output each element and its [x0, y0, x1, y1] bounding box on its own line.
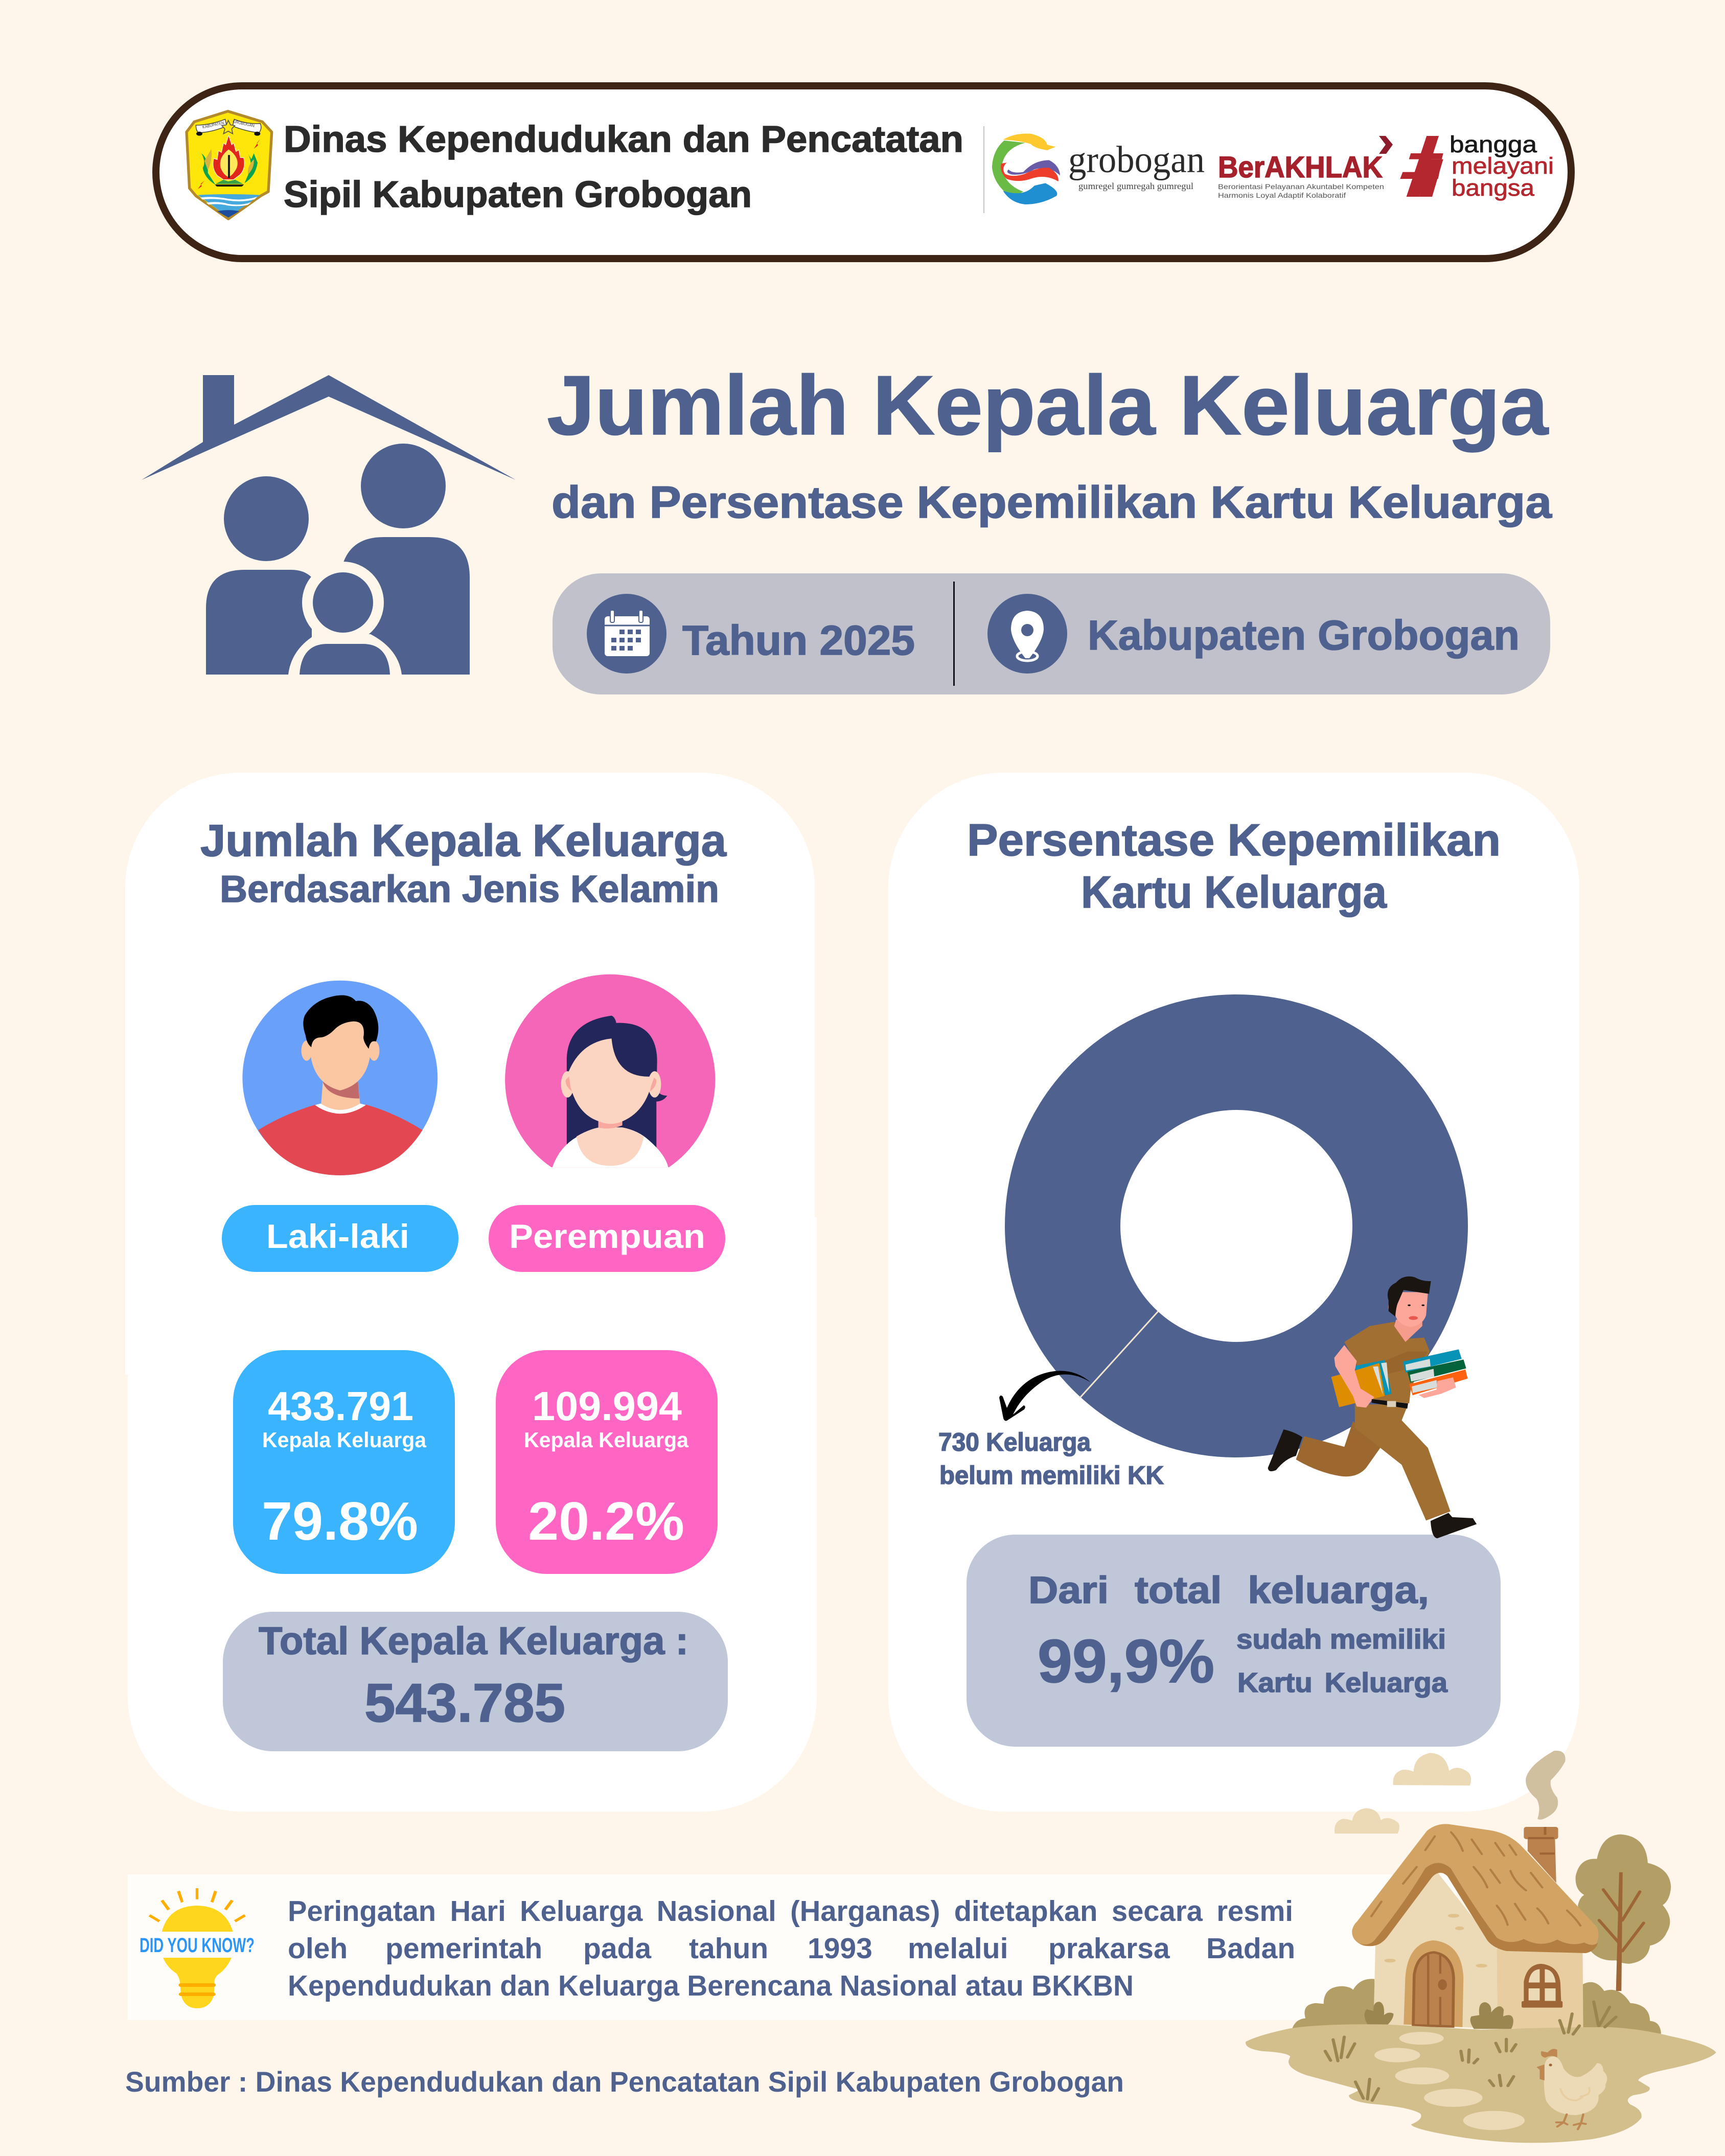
logo: Grobogan: gumregel gumregah gumregul: [1078, 181, 1193, 191]
stat card: male: 433.791: [268, 1383, 413, 1429]
total callout: [223, 1612, 728, 1751]
text: fact paragraph: 1993: [808, 1932, 872, 1965]
logo: BerAKHLAK: BerAKHLAK: [1218, 151, 1383, 184]
text: location: Kabupaten Grobogan: [1088, 612, 1520, 659]
logo: bangga melayani bangsa: bangsa: [1452, 175, 1535, 201]
icon: calendar: [587, 594, 666, 674]
source note: Sumber : Dinas Kependudukan dan Pencatatan Sipil Kabupaten Grobogan: [125, 2066, 1124, 2098]
header text: agency name: Sipil Kabupaten Grobogan: [284, 174, 752, 215]
callout: families without KK: 730 Keluarga: [938, 1428, 1091, 1456]
illustration: running civil servant: [1268, 1277, 1477, 1538]
label: male: Laki-laki: [266, 1217, 409, 1255]
stat card: female: Kepala Keluarga: [524, 1428, 689, 1452]
logo: BerAKHLAK: Harmonis Loyal Adaptif Kolaboratif: [1218, 191, 1346, 199]
logo: bangga melayani bangsa: bangga: [1450, 131, 1537, 157]
panel heading: [200, 815, 727, 910]
subtitle: dan Persentase Kepemilikan Kartu Keluarga: [551, 477, 1552, 527]
stat card: male: [233, 1350, 455, 1574]
text: fact paragraph: Badan: [1206, 1932, 1295, 1965]
panel heading: Berdasarkan Jenis Kelamin: [220, 868, 719, 910]
label: female: Perempuan: [509, 1217, 705, 1255]
icon: Grobogan crest: KABUPATEN: [202, 121, 225, 130]
info pill: year and location: [553, 573, 1550, 694]
icon: light bulb with did you know: [148, 1888, 246, 2008]
stat card: female: 20.2%: [528, 1491, 684, 1551]
text: fact paragraph: prakarsa: [1048, 1932, 1170, 1965]
stat card: male: Kepala Keluarga: [262, 1428, 427, 1452]
logo: BerAKHLAK: Berorientasi Pelayanan Akuntabel Kompeten: [1218, 182, 1384, 191]
icon: Grobogan crest: GROBOGAN: [233, 119, 255, 128]
panel heading: Persentase Kepemilikan: [967, 815, 1501, 865]
donut chart: [1063, 1052, 1410, 1400]
callout: 99,9%: 99,9%: [1038, 1627, 1214, 1696]
header text: agency name: [284, 119, 963, 215]
text: fact paragraph: Kependudukan dan Keluarga Berencana Nasional atau BKKBN: [288, 1969, 1134, 2002]
panel: KK ownership percentage: [888, 773, 1579, 1812]
text: fact paragraph: tahun: [689, 1932, 768, 1965]
panel: household heads by gender: [125, 773, 817, 1812]
stat card: female: 109.994: [532, 1383, 682, 1429]
icon: Grobogan crest: [187, 111, 272, 219]
stat card: male: 79.8%: [262, 1491, 418, 1551]
panel heading: Jumlah Kepala Keluarga: [200, 815, 727, 866]
panel: did you know fact: [128, 1874, 1457, 2020]
panel heading: Kartu Keluarga: [1081, 867, 1387, 917]
text: year: Tahun 2025: [682, 617, 915, 664]
logo: bangga melayani bangsa: [1400, 131, 1554, 201]
text: fact paragraph: melalui: [908, 1932, 1008, 1965]
logo: Grobogan: [992, 133, 1205, 204]
callout: 99,9%: Kartu Keluarga: [1237, 1667, 1448, 1698]
icon: male avatar: [242, 981, 438, 1175]
text: fact paragraph: [288, 1895, 1295, 2002]
text: did you know: DID YOU KNOW?: [140, 1934, 255, 1957]
callout: 99,9%: sudah memiliki: [1236, 1624, 1446, 1655]
header bar: [156, 86, 1571, 259]
label: male: [222, 1205, 458, 1272]
logo: Grobogan: grobogan: [1068, 139, 1205, 181]
total callout: Total Kepala Keluarga :: [259, 1619, 688, 1663]
panel heading: [967, 815, 1501, 917]
logo: bangga melayani bangsa: melayani: [1452, 153, 1554, 179]
header text: agency name: Dinas Kependudukan dan Pencatatan: [284, 119, 963, 160]
title: Jumlah Kepala Keluarga: [547, 358, 1549, 452]
callout: 99,9%: [967, 1535, 1501, 1747]
icon: female avatar: [505, 975, 715, 1167]
arrow: [999, 1371, 1091, 1421]
text: fact paragraph: Peringatan Hari Keluarga Nasional (Harganas) ditetapkan secara resmi: [288, 1895, 1293, 1928]
stat card: female: [496, 1350, 718, 1574]
callout: families without KK: belum memiliki KK: [939, 1461, 1164, 1490]
icon: location pin: [987, 594, 1067, 674]
text: fact paragraph: pada: [583, 1932, 652, 1965]
text: fact paragraph: pemerintah: [385, 1932, 542, 1965]
illustration: cottage scene: [1246, 1751, 1716, 2143]
logo: BerAKHLAK: [1218, 136, 1393, 199]
callout: families without KK: [938, 1428, 1164, 1490]
callout: 99,9%: Dari total keluarga,: [1028, 1569, 1429, 1611]
total callout: 543.785: [364, 1672, 565, 1733]
label: female: [489, 1205, 725, 1272]
icon: family under roof: [142, 375, 516, 675]
text: fact paragraph: oleh: [288, 1932, 348, 1965]
